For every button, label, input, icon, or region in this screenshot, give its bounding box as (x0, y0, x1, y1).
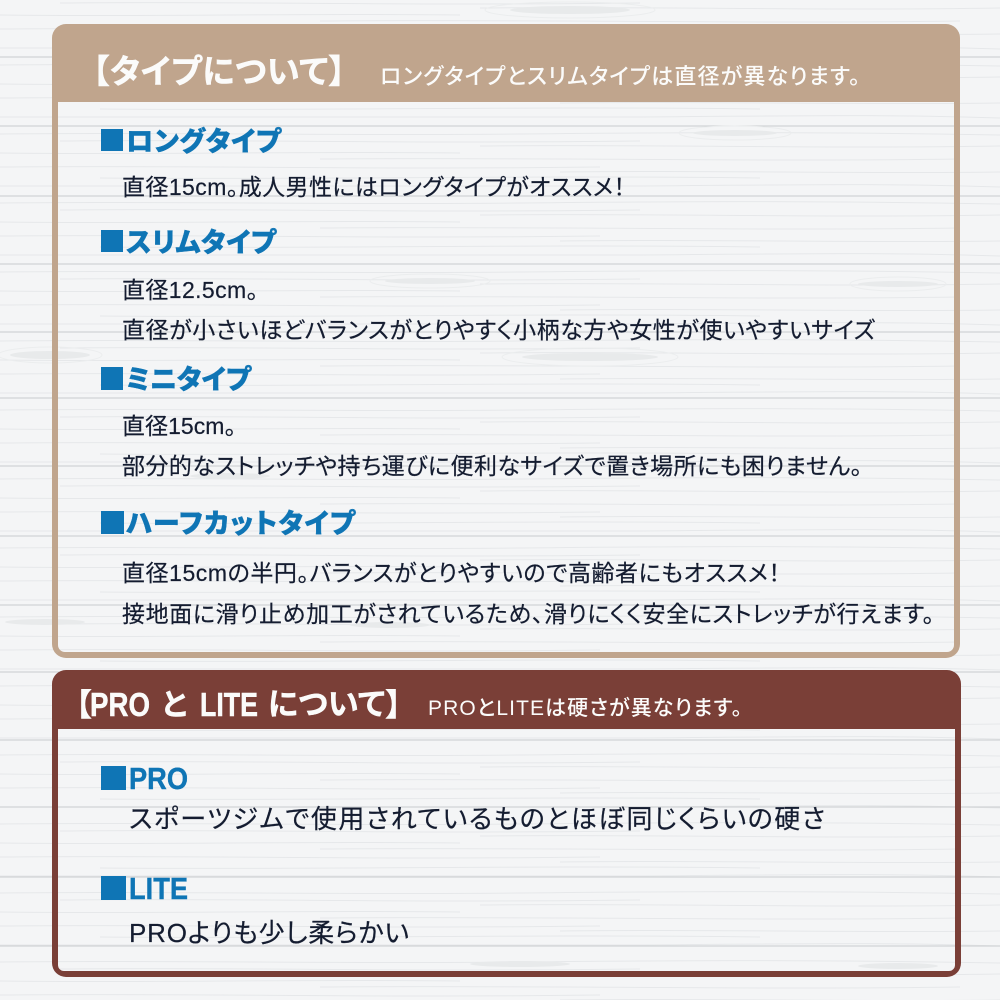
panel frame: types (52, 24, 960, 658)
LITE description: PROよりも少し柔らかい (129, 918, 409, 948)
long type description: 直径15cm。成人男性にはロングタイプがオススメ！ (122, 174, 625, 200)
LITE bullet (101, 876, 126, 900)
subheading: types: ロングタイプとスリムタイプは直径が異なります。 (380, 64, 860, 89)
heading: PRO and LITE: 【 (61, 688, 92, 723)
mini type description line 1: 直径15cm。 (122, 413, 236, 439)
PRO heading: PRO (129, 761, 188, 796)
slim type description line 1: 直径12.5cm。 (122, 277, 258, 303)
section: long type (101, 126, 625, 200)
PRO description: スポーツジムで使用されているものとほぼ同じくらいの硬さ (129, 804, 825, 834)
mini type heading: ミニタイプ (126, 365, 252, 395)
slim type description line 2: 直径が小さいほどバランスがとりやすく小柄な方や女性が使いやすいサイズ (122, 317, 875, 343)
heading: types: タイプについて (110, 53, 328, 90)
panel frame: PRO and LITE (52, 670, 961, 977)
section: slim type (101, 228, 875, 343)
heading: PRO and LITE: について (268, 687, 385, 722)
subheading: PRO and LITE: PROとLITEは硬さが異なります。 (428, 697, 742, 720)
section: PRO (101, 761, 825, 834)
half cut type bullet (101, 511, 124, 534)
heading: PRO and LITE: LITE (200, 686, 258, 723)
heading: PRO and LITE (61, 686, 416, 723)
panel: types (52, 24, 960, 658)
heading: PRO and LITE: と (160, 689, 190, 722)
PRO bullet (101, 766, 126, 790)
heading: types: 【 (77, 53, 110, 90)
slim type heading: スリムタイプ (126, 228, 277, 258)
heading: types: 】 (328, 53, 361, 90)
heading: PRO and LITE: 】 (385, 688, 416, 723)
LITE heading: LITE (129, 871, 188, 906)
section: half cut type (101, 509, 934, 627)
long type bullet (101, 129, 123, 151)
half cut type heading: ハーフカットタイプ (125, 509, 356, 539)
heading: PRO and LITE: PRO (90, 686, 150, 723)
half cut type description line 1: 直径15cmの半円。バランスがとりやすいので高齢者にもオススメ！ (122, 560, 780, 586)
mini type description line 2: 部分的なストレッチや持ち運びに便利なサイズで置き場所にも困りません。 (122, 453, 862, 479)
half cut type description line 2: 接地面に滑り止め加工がされているため、滑りにくく安全にストレッチが行えます。 (122, 601, 934, 627)
long type heading: ロングタイプ (126, 126, 282, 157)
section: LITE (101, 871, 409, 948)
section: mini type (101, 365, 862, 479)
slim type bullet (101, 230, 123, 252)
panel: PRO and LITE (52, 670, 961, 977)
mini type bullet (101, 367, 123, 390)
